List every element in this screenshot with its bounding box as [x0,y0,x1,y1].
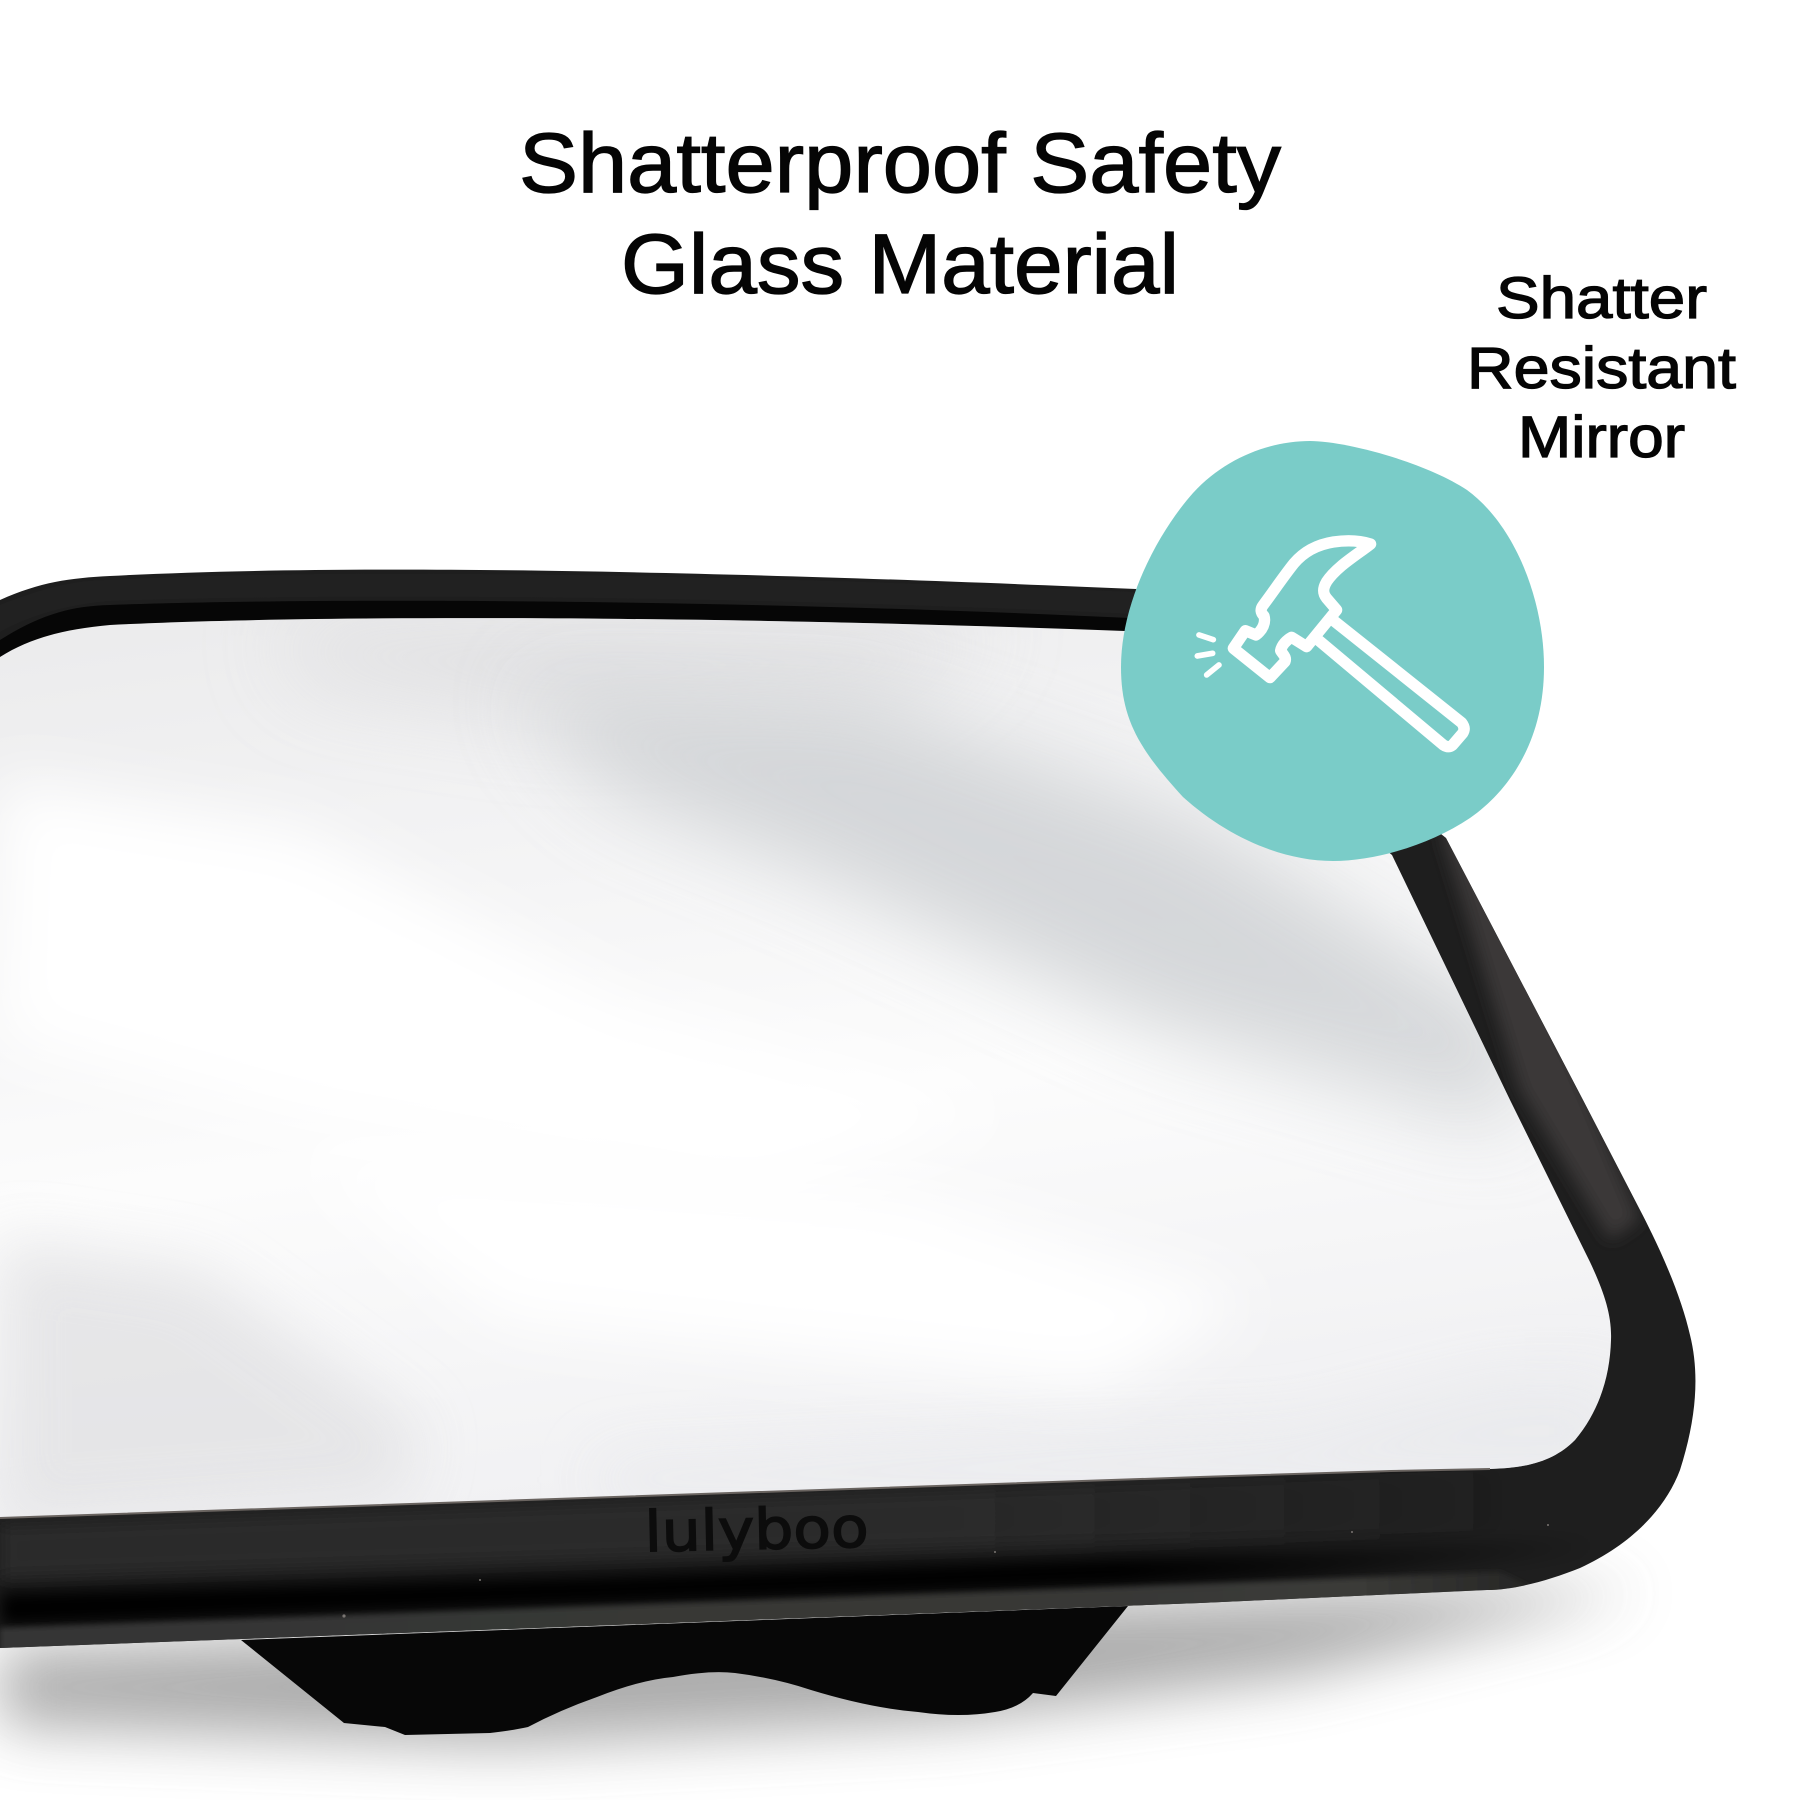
mirror frame [0,570,1695,1660]
bottom rim upper grey [2,1488,1190,1576]
side label: shatter resistant mirror: Mirror [1518,405,1685,470]
side label: shatter resistant mirror: Shatter [1496,266,1707,331]
side label: shatter resistant mirror [1467,266,1736,470]
right rim lighter band [1440,830,1640,1240]
heading: Glass Material [621,217,1179,311]
brand name on frame: lulyboo [644,1496,869,1565]
drop shadow under mirror [0,1590,1640,1745]
side label: shatter resistant mirror: Resistant [1467,336,1736,401]
top rim inner dark band [0,600,1128,657]
suction mount [241,1606,1128,1735]
teal badge [1121,441,1544,861]
mirror glass [0,618,1620,1530]
heading [519,116,1281,311]
bottom rim light strip [0,1573,1524,1648]
bottom rim black band [0,1548,1448,1626]
top rim lighter band [0,574,1136,632]
icon: hammer [1197,541,1464,747]
frame specks [342,1524,1549,1618]
heading: Shatterproof Safety [519,116,1281,210]
